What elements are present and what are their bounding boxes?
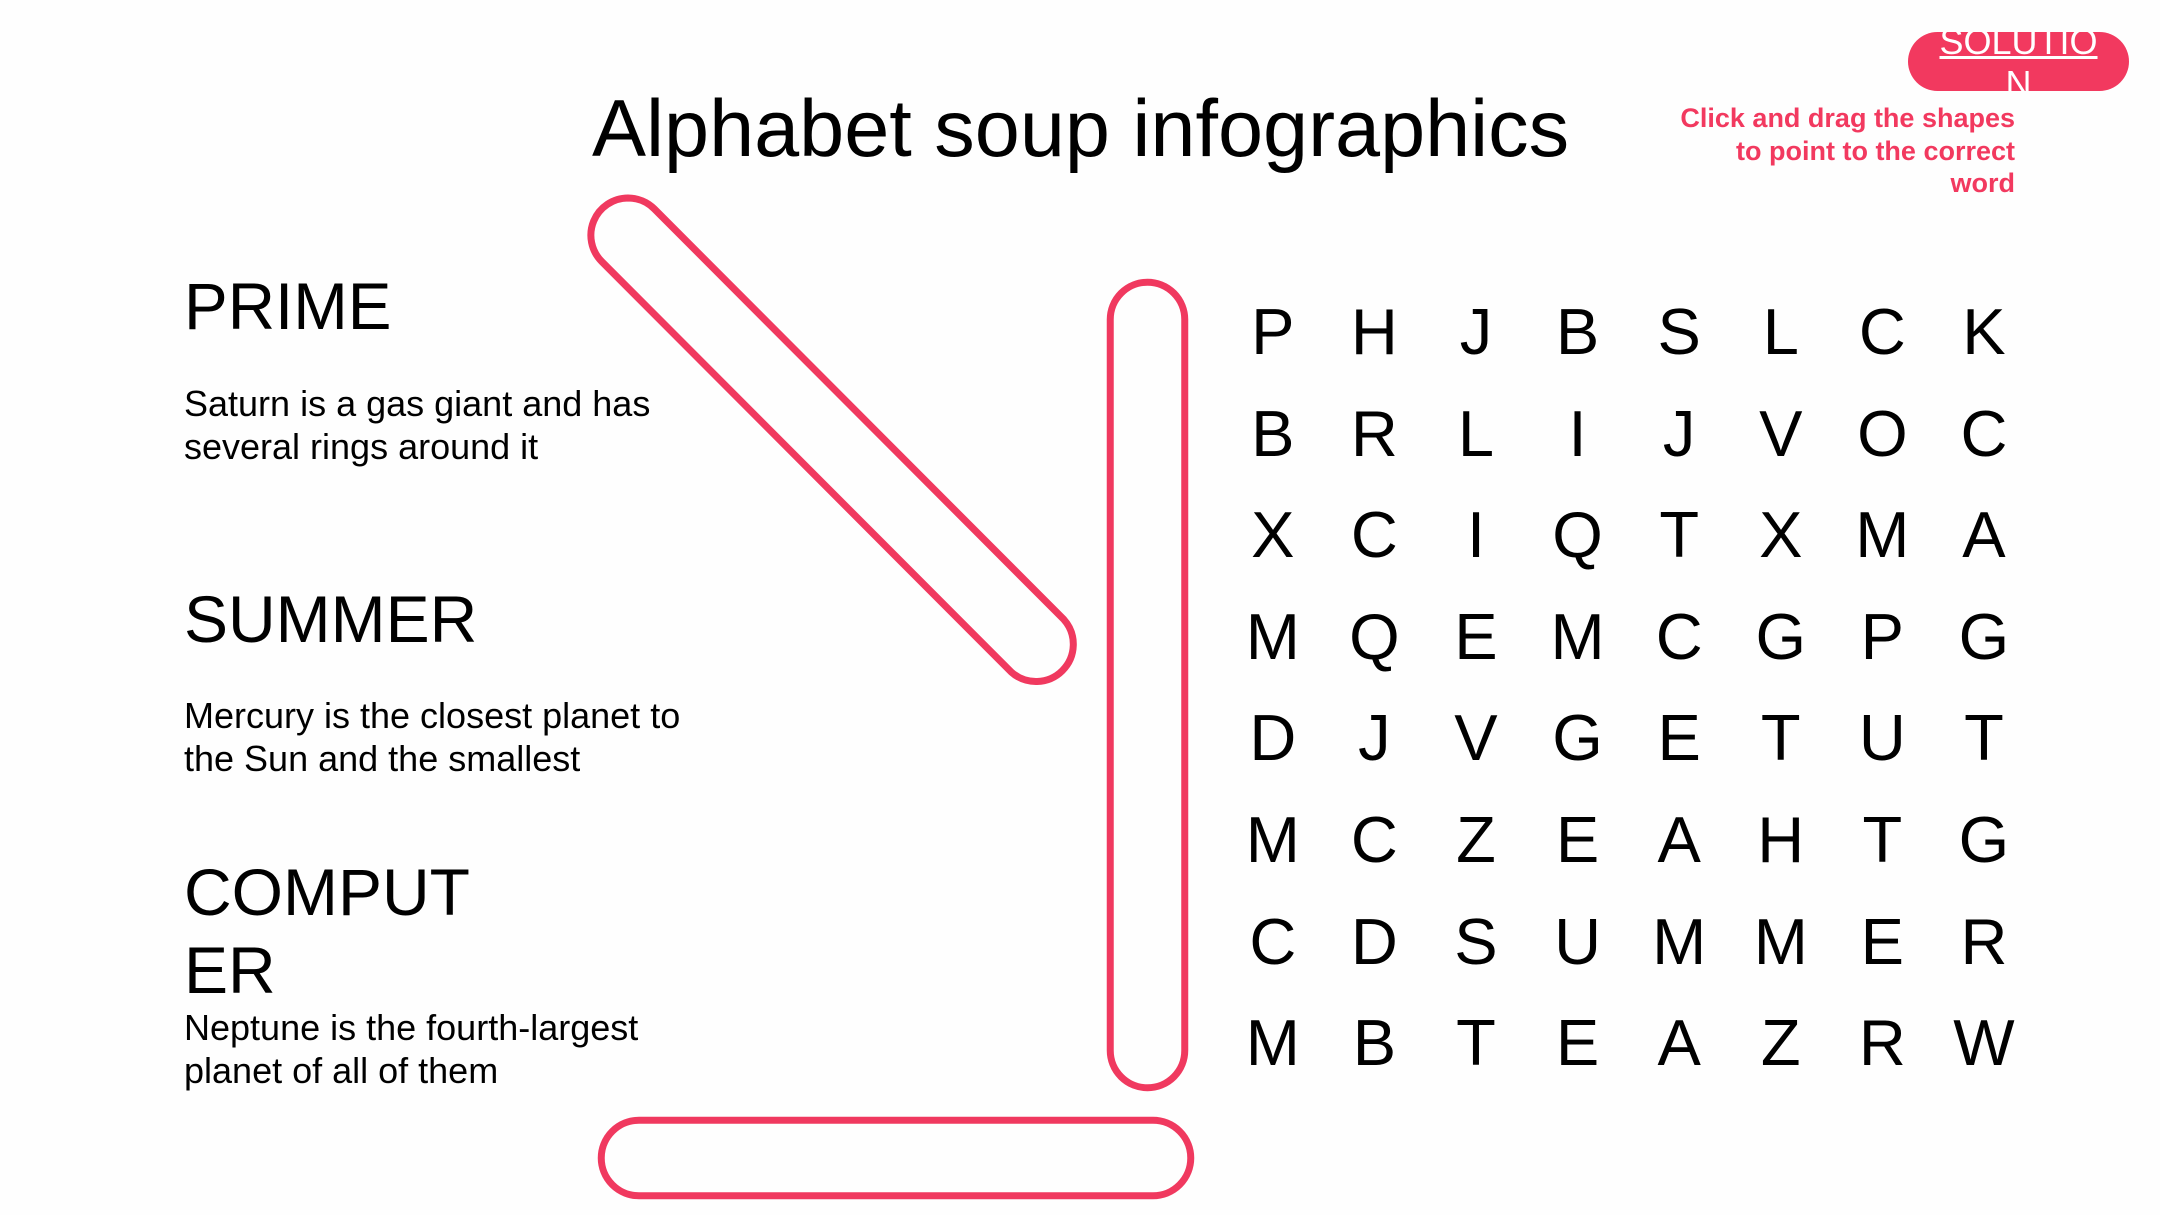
heading: computer — [184, 855, 470, 1007]
letter grid: M — [1246, 803, 1300, 876]
letter grid: U — [1859, 701, 1906, 774]
letter grid: H — [1351, 295, 1398, 368]
description: prime: Saturn is a gas giant and has — [184, 383, 650, 424]
letter grid: L — [1458, 397, 1494, 470]
letter grid: M — [1652, 905, 1706, 978]
word block: summer — [184, 582, 680, 779]
letter grid — [1246, 295, 2015, 1079]
letter grid: E — [1657, 701, 1701, 774]
letter grid: T — [1964, 701, 2004, 774]
heading: computer: COMPUT — [184, 855, 470, 929]
horizontal pill — [601, 1120, 1191, 1196]
word block: computer — [184, 855, 638, 1091]
heading: prime: PRIME — [184, 270, 391, 343]
letter grid: I — [1467, 498, 1485, 571]
letter grid: Q — [1552, 498, 1603, 571]
letter grid: V — [1454, 701, 1498, 774]
letter grid: R — [1351, 397, 1398, 470]
letter grid: X — [1251, 498, 1294, 571]
letter grid: B — [1556, 295, 1599, 368]
letter grid: A — [1657, 803, 1701, 876]
instructions: Click and drag the shapes — [1680, 103, 2015, 133]
word block: prime — [184, 270, 650, 467]
solution button — [1908, 32, 2129, 91]
heading: summer: SUMMER — [184, 582, 477, 656]
letter grid: G — [1755, 600, 1806, 673]
letter grid: I — [1569, 397, 1587, 470]
letter grid: Q — [1349, 600, 1400, 673]
letter grid: K — [1962, 295, 2006, 368]
letter grid: T — [1659, 498, 1699, 571]
description: computer: planet of all of them — [184, 1050, 498, 1091]
diagonal pill outline — [591, 198, 1073, 682]
letter grid: V — [1759, 397, 1802, 470]
letter grid: T — [1456, 1006, 1496, 1079]
letter grid: U — [1554, 905, 1601, 978]
letter grid: R — [1960, 905, 2007, 978]
letter grid: C — [1351, 498, 1398, 571]
letter grid: M — [1754, 905, 1808, 978]
letter grid: B — [1353, 1006, 1396, 1079]
instructions: to point to the correct — [1736, 136, 2015, 166]
letter grid: T — [1761, 701, 1801, 774]
letter grid: E — [1556, 1006, 1599, 1079]
letter grid: M — [1246, 1006, 1300, 1079]
letter grid: P — [1861, 600, 1904, 673]
heading: computer: ER — [184, 933, 276, 1007]
instructions: word — [1950, 168, 2015, 198]
description: summer: Mercury is the closest planet to — [184, 695, 680, 736]
letter grid: Z — [1456, 803, 1496, 876]
description: computer: Neptune is the fourth-largest — [184, 1007, 638, 1048]
letter grid: A — [1657, 1006, 1701, 1079]
letter grid: C — [1859, 295, 1906, 368]
letter grid: S — [1454, 905, 1498, 978]
letter grid: W — [1953, 1006, 2015, 1079]
letter grid: C — [1249, 905, 1296, 978]
letter grid: O — [1857, 397, 1908, 470]
letter grid: G — [1959, 803, 2009, 876]
letter grid: R — [1859, 1006, 1906, 1079]
letter grid: G — [1959, 600, 2009, 673]
letter grid: C — [1351, 803, 1398, 876]
letter grid: X — [1759, 498, 1802, 571]
letter grid: J — [1460, 295, 1492, 368]
letter grid: Z — [1761, 1006, 1801, 1079]
letter grid: T — [1862, 803, 1902, 876]
description: prime — [184, 383, 650, 467]
letter grid: M — [1550, 600, 1605, 673]
letter grid: J — [1663, 397, 1695, 470]
description: prime: several rings around it — [184, 426, 538, 467]
letter grid: E — [1454, 600, 1498, 673]
description: computer — [184, 1007, 638, 1091]
description: summer — [184, 695, 680, 779]
letter grid: G — [1552, 701, 1603, 774]
description: summer: the Sun and the smallest — [184, 738, 580, 779]
letter grid: P — [1251, 295, 1294, 368]
letter grid: H — [1757, 803, 1804, 876]
letter grid: E — [1556, 803, 1599, 876]
letter grid: A — [1962, 498, 2006, 571]
title: Alphabet soup infographics — [592, 84, 1569, 174]
letter grid: L — [1763, 295, 1799, 368]
letter grid: M — [1855, 498, 1909, 571]
letter grid: S — [1657, 295, 1701, 368]
letter grid: M — [1246, 600, 1300, 673]
letter grid: B — [1251, 397, 1294, 470]
letter grid: D — [1249, 701, 1296, 774]
instructions — [1680, 103, 2015, 198]
letter grid: C — [1960, 397, 2007, 470]
letter grid: J — [1358, 701, 1391, 774]
letter grid: D — [1351, 905, 1398, 978]
letter grid: E — [1861, 905, 1904, 978]
vertical pill — [1110, 282, 1185, 1088]
letter grid: C — [1656, 600, 1703, 673]
